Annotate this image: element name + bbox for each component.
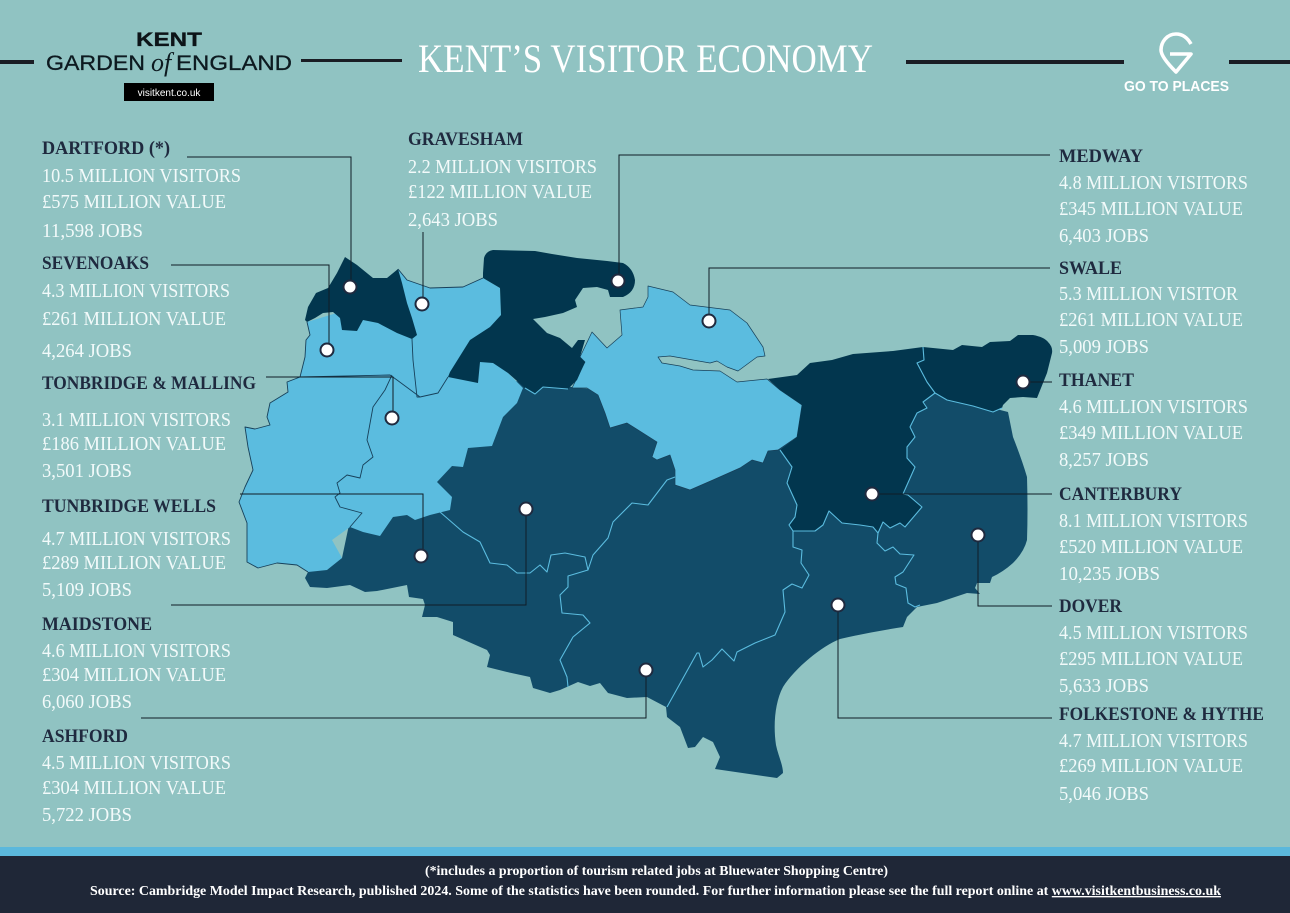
panel: Tunbridge Wells stats: 5,109 JOBS <box>42 579 132 601</box>
panel: Swale stats <box>1059 258 1243 358</box>
panel: Thanet stats <box>1059 370 1248 471</box>
panel: Sevenoaks stats: SEVENOAKS <box>42 253 149 274</box>
panel: Gravesham stats <box>408 129 597 231</box>
panel: Medway stats: £345 MILLION VALUE <box>1059 198 1243 220</box>
district boundaries on light land <box>239 269 483 572</box>
panel: Maidstone stats: 6,060 JOBS <box>42 691 132 713</box>
panel: Canterbury stats: CANTERBURY <box>1059 484 1182 505</box>
panel: Sevenoaks stats: £261 MILLION VALUE <box>42 308 226 330</box>
panel: Dover stats: 4.5 MILLION VISITORS <box>1059 622 1248 644</box>
panel: Maidstone stats: 4.6 MILLION VISITORS <box>42 640 231 662</box>
logo: Kent Garden of England: visitkent.co.uk <box>138 88 201 99</box>
district boundaries on dark land <box>440 347 1002 707</box>
panel: Swale stats: 5.3 MILLION VISITOR <box>1059 283 1239 305</box>
logo: Go To Places <box>1124 34 1229 95</box>
panel: Dartford stats: £575 MILLION VALUE <box>42 191 226 213</box>
panel: Tonbridge and Malling stats: TONBRIDGE & MALLING <box>42 373 256 394</box>
districts: Canterbury and Thanet <box>768 335 1052 533</box>
panel: Ashford stats <box>42 726 231 826</box>
panel: Maidstone stats <box>42 614 231 713</box>
panel: Gravesham stats: 2,643 JOBS <box>408 209 498 231</box>
footer <box>0 847 1290 913</box>
panel: Tunbridge Wells stats: £289 MILLION VALUE <box>42 552 226 574</box>
title: KENT’S VISITOR ECONOMY <box>418 36 873 81</box>
panel: Sevenoaks stats: 4.3 MILLION VISITORS <box>42 280 230 302</box>
panel: Folkestone and Hythe stats: £269 MILLION VALUE <box>1059 755 1243 777</box>
panel: Tonbridge and Malling stats: £186 MILLION VALUE <box>42 433 226 455</box>
panel: Gravesham stats: £122 MILLION VALUE <box>408 181 592 203</box>
district: Medway <box>448 250 635 394</box>
panel: Swale stats: 5,009 JOBS <box>1059 336 1149 358</box>
panel: Dartford stats: 11,598 JOBS <box>42 220 143 242</box>
district: Dartford <box>305 257 417 339</box>
panel: Medway stats: 4.8 MILLION VISITORS <box>1059 172 1248 194</box>
logo: Kent Garden of England: ENGLAND <box>176 52 292 75</box>
panel: Medway stats <box>1059 146 1248 247</box>
map of Kent districts <box>239 250 1052 778</box>
panel: Canterbury stats <box>1059 484 1248 585</box>
panel: Canterbury stats: 8.1 MILLION VISITORS <box>1059 510 1248 532</box>
panel: Maidstone stats: £304 MILLION VALUE <box>42 664 226 686</box>
panel: Ashford stats: 5,722 JOBS <box>42 804 132 826</box>
logo: Kent Garden of England: GARDEN <box>46 52 145 75</box>
panel: Dover stats: DOVER <box>1059 596 1122 617</box>
leader lines <box>141 155 1052 718</box>
panel: Folkestone and Hythe stats: 5,046 JOBS <box>1059 783 1149 805</box>
panel: Dartford stats: DARTFORD (*) <box>42 138 170 159</box>
panel: Ashford stats: £304 MILLION VALUE <box>42 777 226 799</box>
panel: Medway stats: 6,403 JOBS <box>1059 225 1149 247</box>
logo: Kent Garden of England: KENT <box>136 30 202 51</box>
panel: Swale stats: £261 MILLION VALUE <box>1059 309 1243 331</box>
panel: Dover stats: £295 MILLION VALUE <box>1059 648 1243 670</box>
footnote: (*includes a proportion of tourism related jobs at Bluewater Shopping Centre) <box>425 863 888 878</box>
panel: Tunbridge Wells stats: TUNBRIDGE WELLS <box>42 496 216 517</box>
panel: Dover stats: 5,633 JOBS <box>1059 675 1149 697</box>
panel: Ashford stats: 4.5 MILLION VISITORS <box>42 752 231 774</box>
districts: Sevenoaks, Gravesham, Tonbridge and Malling, Tunbridge Wells north <box>239 269 523 572</box>
panel: Thanet stats: 4.6 MILLION VISITORS <box>1059 396 1248 418</box>
panel: Sevenoaks stats <box>42 253 230 362</box>
panel: Medway stats: MEDWAY <box>1059 146 1143 167</box>
panel: Folkestone and Hythe stats <box>1059 704 1264 805</box>
panel: Tunbridge Wells stats <box>42 496 231 601</box>
panel: Tunbridge Wells stats: 4.7 MILLION VISITORS <box>42 528 231 550</box>
header rules <box>0 59 1290 64</box>
panel: Tonbridge and Malling stats: 3.1 MILLION VISITORS <box>42 409 231 431</box>
panel: Thanet stats: THANET <box>1059 370 1134 391</box>
panel: Thanet stats: 8,257 JOBS <box>1059 449 1149 471</box>
panel: Dover stats <box>1059 596 1248 697</box>
panel: Folkestone and Hythe stats: 4.7 MILLION VISITORS <box>1059 730 1248 752</box>
panel: Canterbury stats: £520 MILLION VALUE <box>1059 536 1243 558</box>
panel: Gravesham stats: GRAVESHAM <box>408 129 523 150</box>
source line: Source: Cambridge Model Impact Research, published 2024. Some of the statistics have been rounded. For further information please see the full report online at www.visitkentbusiness.co.uk <box>90 883 1222 898</box>
panel: Ashford stats: ASHFORD <box>42 726 128 747</box>
logo: Kent Garden of England: of <box>151 48 175 77</box>
panel: Folkestone and Hythe stats: FOLKESTONE & HYTHE <box>1059 704 1264 725</box>
panel: Gravesham stats: 2.2 MILLION VISITORS <box>408 156 597 178</box>
logo: Kent Garden of England <box>46 30 292 101</box>
district: Swale <box>572 286 802 490</box>
panel: Sevenoaks stats: 4,264 JOBS <box>42 340 132 362</box>
location pins <box>320 274 1030 676</box>
panel: Thanet stats: £349 MILLION VALUE <box>1059 422 1243 444</box>
panel: Swale stats: SWALE <box>1059 258 1122 279</box>
districts: Tunbridge Wells south, Maidstone, Ashford, Folkestone and Hythe, Dover <box>305 380 1028 778</box>
panel: Canterbury stats: 10,235 JOBS <box>1059 563 1160 585</box>
panel: Tonbridge and Malling stats: 3,501 JOBS <box>42 460 132 482</box>
panel: Dartford stats: 10.5 MILLION VISITORS <box>42 165 241 187</box>
panel: Maidstone stats: MAIDSTONE <box>42 614 152 635</box>
logo: Go To Places: GO TO PLACES <box>1124 78 1229 95</box>
panel: Tonbridge and Malling stats <box>42 373 256 482</box>
panel: Dartford stats <box>42 138 241 242</box>
